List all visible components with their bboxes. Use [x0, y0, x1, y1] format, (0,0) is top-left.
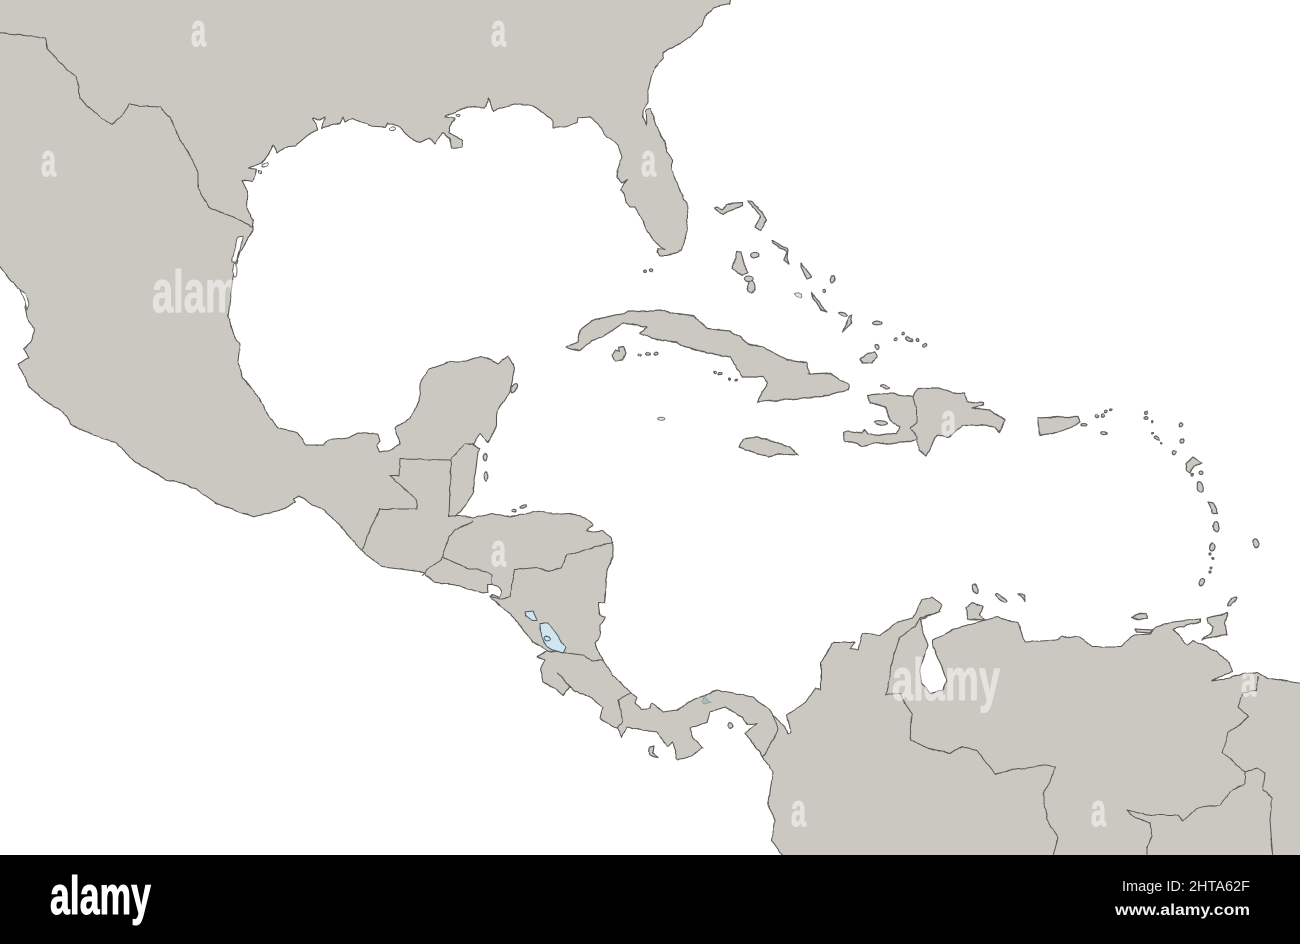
paraguana peninsula: [966, 602, 985, 620]
lake nicaragua and lake managua: [525, 611, 711, 704]
cuba: [566, 310, 849, 402]
watermark letters: a: [1241, 654, 1256, 706]
coastal lagoons: [20, 114, 460, 310]
bahamas and turks islands: [714, 201, 927, 363]
watermark letters: a: [791, 784, 806, 836]
watermark letters: a: [491, 4, 506, 56]
lesser antilles: [971, 409, 1260, 633]
trinidad: [1202, 613, 1228, 640]
hispaniola: [843, 388, 1005, 456]
watermark letters: alamy: [892, 647, 1000, 713]
footer bar: [0, 855, 1300, 944]
watermark letters: a: [641, 134, 656, 186]
jamaica: [739, 437, 798, 457]
watermark letters: a: [941, 394, 956, 446]
watermark letters: a: [491, 524, 506, 576]
watermark letters: alamy: [152, 259, 260, 325]
footer logo: alamy: [50, 866, 151, 926]
puerto rico: [1038, 417, 1080, 435]
watermark letters: a: [191, 4, 206, 56]
central american islands: [483, 382, 734, 757]
website: www.alamy.com: [1114, 902, 1250, 919]
florida keys, isle of youth and small cuban islands: [612, 268, 890, 426]
watermark letters: a: [1091, 784, 1106, 836]
image id: Image ID: 2HTA62F: [1122, 879, 1250, 895]
watermark letters: a: [41, 134, 56, 186]
